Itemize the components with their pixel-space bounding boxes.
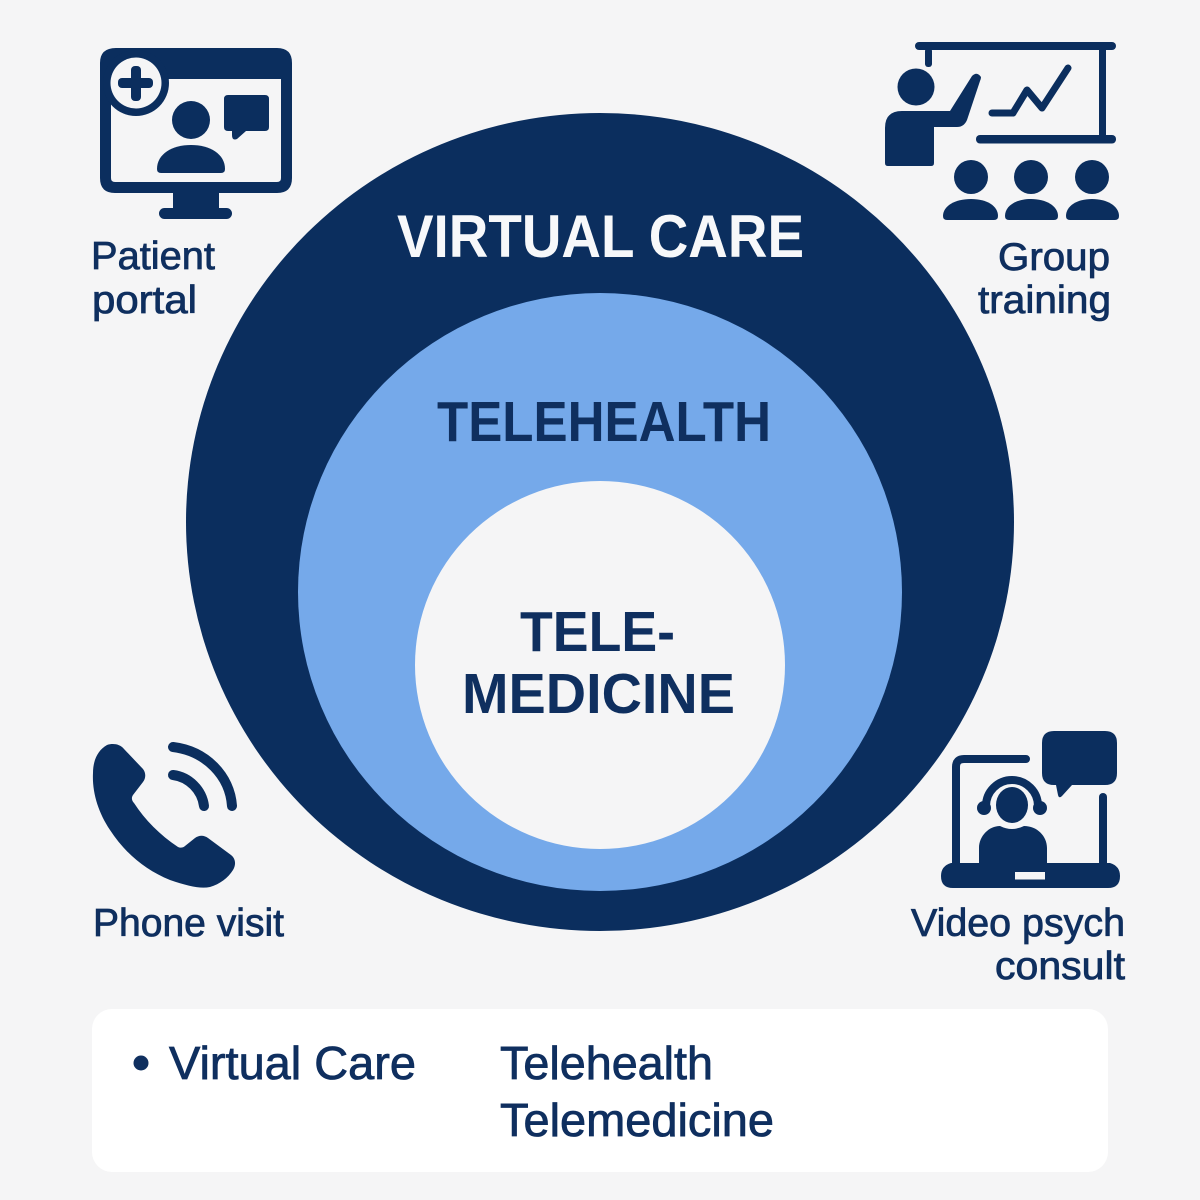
- label: patient portal: [91, 235, 215, 322]
- icon: video psych consult: [941, 731, 1120, 888]
- label: video psych consult: [911, 902, 1125, 988]
- label: video psych consult: consult: [995, 945, 1125, 988]
- legend item: telemedicine: Telemedicine: [500, 1094, 774, 1146]
- icon: group training: [885, 42, 1119, 220]
- inner circle: telemedicine: [415, 481, 785, 849]
- icon: phone visit: [93, 744, 235, 888]
- label: video psych consult: Video psych: [911, 902, 1125, 945]
- heading: telemedicine: TELE-: [520, 600, 675, 664]
- label: group training: Group: [998, 236, 1110, 279]
- label: group training: [978, 236, 1111, 322]
- middle circle: telehealth: [298, 293, 902, 891]
- legend bullet: [134, 1056, 148, 1070]
- label: patient portal: portal: [92, 279, 197, 322]
- nested circles diagram: [186, 113, 1014, 931]
- label: group training: training: [978, 279, 1111, 322]
- legend item: telehealth: Telehealth: [500, 1037, 713, 1089]
- legend item: virtual care: Virtual Care: [169, 1037, 416, 1089]
- heading: telemedicine: [462, 600, 735, 726]
- heading: virtual care: VIRTUAL CARE: [397, 203, 804, 270]
- label: patient portal: Patient: [91, 235, 215, 278]
- heading: telemedicine: MEDICINE: [462, 662, 735, 726]
- panel: legend: [92, 1009, 1108, 1172]
- icon: patient portal monitor: [100, 48, 292, 219]
- outer circle: virtual care: [186, 113, 1014, 931]
- label: phone visit: Phone visit: [93, 902, 284, 945]
- heading: telehealth: TELEHEALTH: [437, 390, 771, 454]
